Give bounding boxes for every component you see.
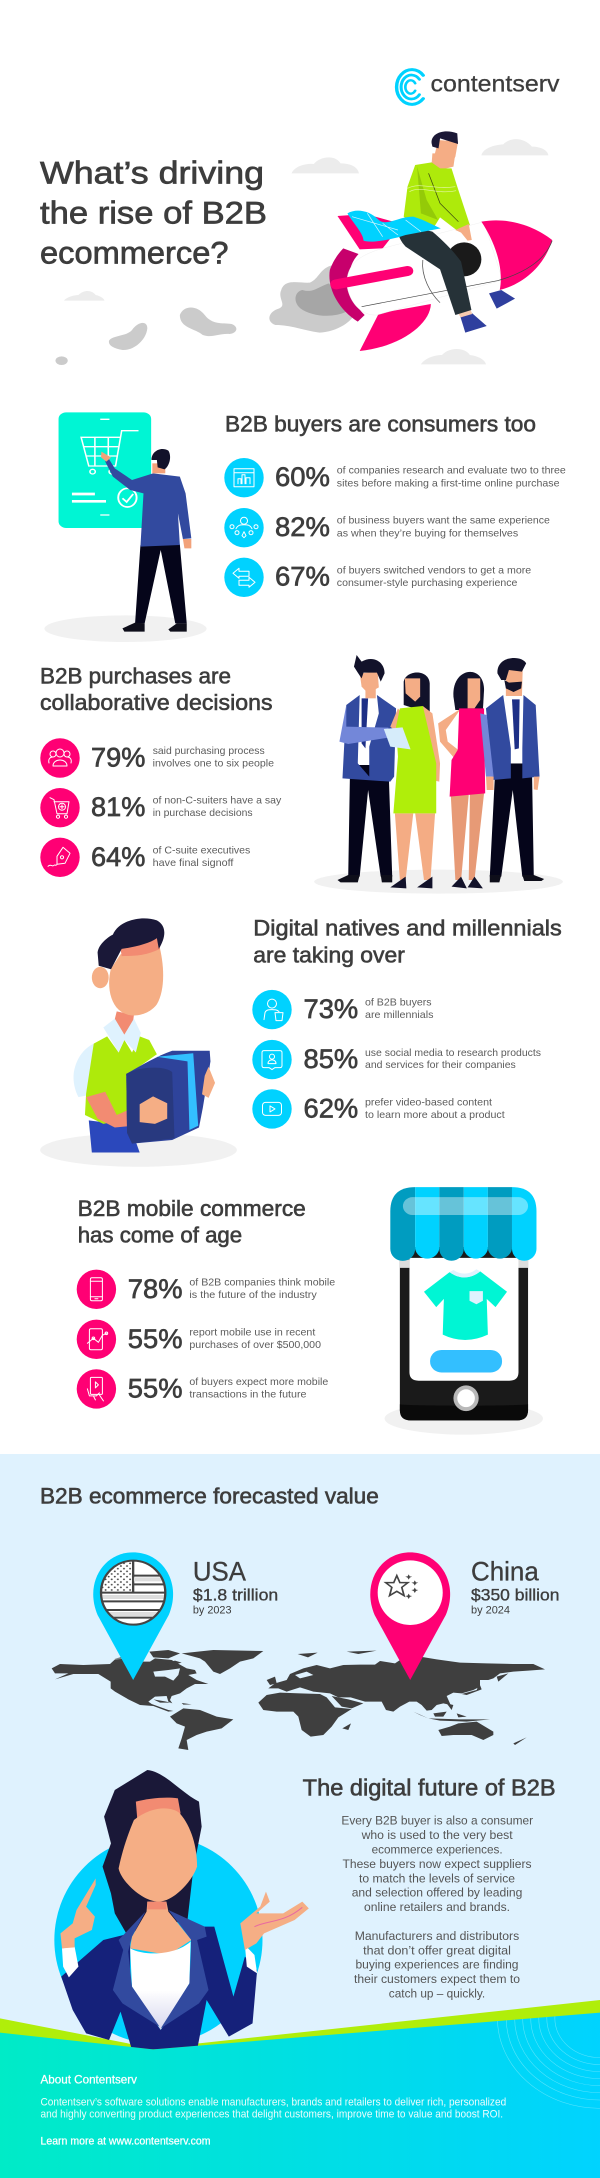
- label: China: by 2024: [471, 1604, 510, 1616]
- icon: social profile bubble: [262, 1051, 282, 1070]
- heading: has come of age: [78, 1222, 242, 1248]
- man right beard: [504, 680, 522, 692]
- stat: 78%: 78%: [128, 1274, 182, 1304]
- description: report mobile use in recent: [189, 1327, 315, 1339]
- paragraph one: ecommerce experiences.: [372, 1842, 503, 1856]
- t-shirt: [424, 1271, 507, 1340]
- home button: [453, 1385, 479, 1411]
- hair: [432, 131, 458, 148]
- hair: [103, 1770, 202, 1933]
- woman left arm: [423, 706, 440, 782]
- heading: collaborative decisions: [40, 690, 272, 715]
- description: as when they’re buying for themselves: [337, 527, 518, 539]
- learn more link: Learn more at www.contentserv.com: [40, 2136, 211, 2148]
- man left hair: [354, 655, 385, 682]
- uk: [267, 1677, 277, 1685]
- stat: 55% future transactions: 55%: [128, 1374, 182, 1404]
- heading: [40, 664, 272, 715]
- description: transactions in the future: [189, 1388, 307, 1400]
- description: involves one to six people: [153, 758, 274, 770]
- stat: 81%: [40, 788, 282, 827]
- sleeve: [74, 1044, 109, 1097]
- icon: person and stars: [230, 517, 258, 538]
- icon: switch arrows: [233, 568, 255, 587]
- madagascar: [342, 1723, 351, 1730]
- title: What’s driving: [40, 154, 264, 190]
- sweater: [404, 162, 470, 231]
- stat: 64%: 64%: [91, 842, 145, 872]
- man left shirt: [358, 695, 377, 765]
- description: [189, 1376, 328, 1400]
- paragraph one: Every B2B buyer is also a consumer: [341, 1814, 533, 1828]
- footer band and background: [0, 2000, 600, 2178]
- description: [153, 745, 274, 770]
- icon: smartphone: [90, 1278, 102, 1301]
- trousers: [398, 224, 471, 315]
- icon: shopping cart: [50, 798, 69, 818]
- ground shadow: [314, 870, 563, 894]
- trousers: [89, 1120, 140, 1152]
- forearm: [86, 1092, 167, 1127]
- stat: 55% future transactions: [77, 1369, 328, 1409]
- description: of non-C-suiters have a say: [153, 795, 282, 807]
- description: is the future of the industry: [189, 1289, 318, 1301]
- right cuff: [245, 1945, 257, 1973]
- shoes: [122, 623, 187, 632]
- woman left dress: [393, 706, 436, 813]
- stat: 62%: [252, 1089, 505, 1129]
- description: are millennials: [365, 1009, 434, 1021]
- stat: 85%: [252, 1040, 541, 1079]
- lapels: [113, 1910, 209, 2028]
- stat: 55% recent purchases: 55%: [128, 1324, 182, 1354]
- icon: browser chart: [234, 469, 254, 487]
- trousers: [135, 544, 187, 623]
- illustration: four business people: [314, 655, 563, 894]
- description: in purchase decisions: [153, 807, 253, 819]
- man right hair: [497, 658, 526, 680]
- jacket: [105, 457, 191, 547]
- woman left hair: [404, 672, 430, 713]
- heading: are taking over: [253, 942, 405, 968]
- new zealand: [513, 1737, 527, 1745]
- description: of companies research and evaluate two to three: [337, 465, 566, 477]
- shoes: [489, 290, 515, 309]
- phone screen: [409, 1258, 518, 1381]
- baltic: [295, 1672, 313, 1678]
- description: and services for their companies: [365, 1059, 516, 1071]
- panel: The digital future of B2B: [303, 1774, 556, 2001]
- heading: Digital natives and millennials: [253, 916, 562, 941]
- heading: The digital future of B2B: [303, 1774, 556, 1800]
- description: said purchasing process: [153, 745, 265, 757]
- svalbard: [347, 1651, 377, 1654]
- icon: fountain pen: [48, 847, 70, 866]
- heading: [253, 916, 562, 968]
- illustration: young man holding package: [40, 918, 237, 1167]
- stat: 79%: 79%: [91, 743, 145, 773]
- rocket stripe: [336, 271, 408, 284]
- description: of C-suite executives: [153, 844, 250, 856]
- heading: B2B purchases are: [40, 664, 231, 689]
- pin: USA: [93, 1552, 173, 1680]
- panel: B2B mobile commerce: [77, 1187, 543, 1435]
- paragraph one: who is used to the very best: [361, 1828, 513, 1842]
- man right neck and face: [506, 670, 523, 696]
- description: purchases of over $500,000: [189, 1339, 321, 1351]
- title: ecommerce?: [40, 234, 228, 270]
- ground shadow: [40, 1133, 237, 1167]
- tablet: [384, 727, 411, 749]
- rings decoration: [497, 2016, 600, 2109]
- forehead shadow: [136, 1798, 181, 1818]
- scarf: [347, 211, 441, 242]
- paragraph one: to match the levels of service: [359, 1871, 515, 1885]
- jacket: [61, 1927, 257, 2050]
- australia: [438, 1722, 493, 1740]
- illustration: man at shopping screen: [44, 412, 207, 642]
- arabia: [332, 1696, 363, 1708]
- description: [189, 1327, 321, 1351]
- package: [126, 1051, 210, 1144]
- title: the rise of B2B: [40, 194, 267, 230]
- stat: 81%: 81%: [91, 792, 145, 822]
- icon: video play: [262, 1102, 282, 1115]
- icon: group of people: [49, 749, 71, 766]
- description: sites before making a first-time online purchase: [337, 477, 560, 489]
- world map: [52, 1650, 545, 1750]
- label: China: China: [471, 1557, 540, 1587]
- man right trousers: [490, 763, 534, 877]
- paragraph two: their customers expect them to: [354, 1972, 520, 1986]
- description: of buyers expect more mobile: [189, 1376, 328, 1388]
- man left face: [360, 672, 379, 693]
- icon: phone with graph: [87, 1329, 108, 1350]
- description: prefer video-based content: [365, 1096, 492, 1108]
- description: consumer-style purchasing experience: [337, 577, 518, 589]
- left hand: [60, 1878, 96, 1948]
- about heading: About Contentserv: [40, 2072, 137, 2086]
- panel: forecast background: [0, 1454, 600, 2178]
- panel: About Contentserv: [40, 2072, 506, 2148]
- label: USA: by 2023: [193, 1604, 232, 1616]
- hands: [101, 452, 191, 548]
- neck: [114, 1011, 134, 1036]
- stat: 73%: 73%: [304, 994, 358, 1024]
- man right jacket: [486, 695, 540, 780]
- description: [365, 997, 434, 1021]
- paragraph two: that don’t offer great digital: [363, 1943, 511, 1957]
- eurasia: [268, 1657, 545, 1712]
- illustration: woman presenting: [54, 1770, 309, 2050]
- paragraph two: catch up – quickly.: [389, 1987, 485, 2001]
- clouds: [64, 139, 548, 364]
- buy button: [430, 1350, 502, 1372]
- stat: 67%: 67%: [275, 562, 330, 592]
- right hand: [240, 1892, 309, 1950]
- hand: [455, 224, 472, 241]
- description: [153, 795, 282, 819]
- hands: [140, 1067, 215, 1124]
- heading: [78, 1196, 306, 1248]
- illustration: phone storefront: [385, 1187, 543, 1435]
- label: USA: $1.8 trillion: [193, 1586, 278, 1605]
- forehead shadow: [121, 938, 160, 956]
- description: have final signoff: [153, 857, 233, 869]
- woman right hair: [453, 672, 484, 710]
- japan: [462, 1683, 482, 1695]
- caribbean: [153, 1699, 192, 1705]
- paragraph two: Manufacturers and distributors: [355, 1929, 519, 1943]
- description: of B2B buyers: [365, 997, 432, 1009]
- man left trousers: [348, 763, 392, 877]
- vest: [85, 1036, 157, 1124]
- left cuff: [62, 1947, 78, 1977]
- woman left legs: [395, 813, 435, 880]
- description: [189, 1276, 335, 1301]
- kamchatka: [497, 1673, 508, 1682]
- about text: and highly converting product experiences that delight customers, improve time to value and boost ROI.: [40, 2109, 503, 2121]
- label: USA: USA: [193, 1557, 246, 1587]
- heading: B2B mobile commerce: [78, 1196, 306, 1221]
- rocket nose: [481, 220, 552, 290]
- woman right dress: [450, 708, 485, 797]
- white top: [130, 1942, 191, 2030]
- panel: B2B buyers are consumers too: [44, 412, 566, 642]
- stat: 78%: [77, 1270, 335, 1309]
- face: [119, 1808, 197, 1902]
- ground shadow: [385, 1402, 543, 1435]
- icon: concentric C: [397, 70, 423, 104]
- woman right legs: [451, 793, 484, 880]
- pin: China: [370, 1552, 450, 1680]
- stat: 85%: 85%: [304, 1044, 358, 1074]
- americas: [52, 1650, 263, 1750]
- cart icon: [72, 419, 139, 515]
- label: China: [471, 1557, 560, 1616]
- stat: 67%: [224, 558, 531, 597]
- head: [152, 463, 165, 473]
- head: [434, 140, 458, 163]
- man right shirt: [503, 693, 524, 763]
- arctic islands: [115, 1650, 182, 1665]
- stat: 79%: [40, 738, 274, 778]
- description: [337, 515, 550, 539]
- stat: 82%: 82%: [275, 512, 330, 542]
- heading: B2B ecommerce forecasted value: [40, 1483, 379, 1508]
- flag: USA: [101, 1560, 166, 1625]
- panel: B2B ecommerce forecasted value: [40, 1483, 560, 1750]
- stat: 82%: [224, 508, 550, 547]
- title: [40, 154, 267, 270]
- icon: person with cup: [264, 999, 283, 1021]
- flag: China: [378, 1560, 443, 1625]
- ear and face: [92, 967, 109, 988]
- man left jacket: [342, 695, 396, 782]
- blue circle: [54, 1836, 262, 2044]
- description: of B2B companies think mobile: [189, 1276, 335, 1288]
- stat: 60%: 60%: [275, 462, 330, 492]
- heading: B2B buyers are consumers too: [225, 412, 536, 437]
- rocket nozzle: [329, 248, 365, 322]
- footer gradient: [0, 2013, 600, 2178]
- stat: 60%: [224, 458, 566, 497]
- panel: B2B purchases are collaborative decisions: [40, 655, 563, 894]
- description: to learn more about a product: [365, 1109, 505, 1121]
- stat: 73%: [252, 990, 434, 1029]
- panel: Digital natives and millennials: [40, 916, 562, 1167]
- africa: [258, 1693, 352, 1737]
- collar: [103, 1019, 141, 1052]
- greenland: [182, 1650, 263, 1674]
- iceland: [298, 1653, 318, 1657]
- brand name: contentserv: [430, 71, 560, 97]
- hair: [98, 918, 164, 969]
- description: [365, 1047, 541, 1071]
- hudson bay: [153, 1668, 180, 1681]
- south america: [170, 1708, 233, 1750]
- man left neck: [365, 688, 376, 698]
- woman right arm: [438, 708, 461, 762]
- description: of business buyers want the same experience: [337, 515, 550, 527]
- smoke puffs: [55, 265, 356, 365]
- lime band: [0, 2000, 600, 2050]
- logo: contentserv: [397, 70, 560, 104]
- description: [337, 564, 531, 589]
- label: USA: [193, 1557, 278, 1616]
- label: China: $350 billion: [471, 1586, 560, 1605]
- description: [365, 1096, 505, 1121]
- description: use social media to research products: [365, 1047, 541, 1059]
- icon: hand holding phone: [87, 1377, 103, 1401]
- description: [153, 844, 250, 869]
- rocket window: [447, 242, 481, 276]
- paragraph one: and selection offered by leading: [352, 1886, 522, 1900]
- about text: [40, 2097, 506, 2121]
- hero illustration: man riding rocket: [55, 131, 552, 365]
- screen board: [59, 412, 151, 528]
- awning: [390, 1187, 536, 1261]
- rocket body: [347, 222, 502, 315]
- rocket fins: [337, 214, 402, 249]
- neck: [432, 153, 455, 170]
- paragraph two: buying experiences are finding: [356, 1958, 518, 1972]
- paragraph two: [354, 1929, 520, 2001]
- phone body: [400, 1247, 528, 1420]
- ground shadow: [44, 615, 207, 642]
- stat: 62%: 62%: [304, 1094, 358, 1124]
- paragraph one: online retailers and brands.: [364, 1900, 510, 1914]
- neck and chest: [130, 1902, 191, 1955]
- stat: 55% recent purchases: [77, 1320, 321, 1359]
- paragraph one: These buyers now expect suppliers: [342, 1857, 532, 1871]
- stat: 64%: [40, 838, 250, 877]
- description: [337, 465, 566, 489]
- man left arms: [339, 705, 390, 744]
- southeast asia islands: [413, 1703, 490, 1722]
- paragraph one: [341, 1814, 533, 1914]
- north america: [52, 1658, 208, 1712]
- eurasia, africa and oceania: [258, 1651, 545, 1745]
- description: of buyers switched vendors to get a more: [337, 564, 531, 576]
- about text: Contentserv’s software solutions enable manufacturers, brands and retailers to deliver rich, personalized: [40, 2097, 506, 2109]
